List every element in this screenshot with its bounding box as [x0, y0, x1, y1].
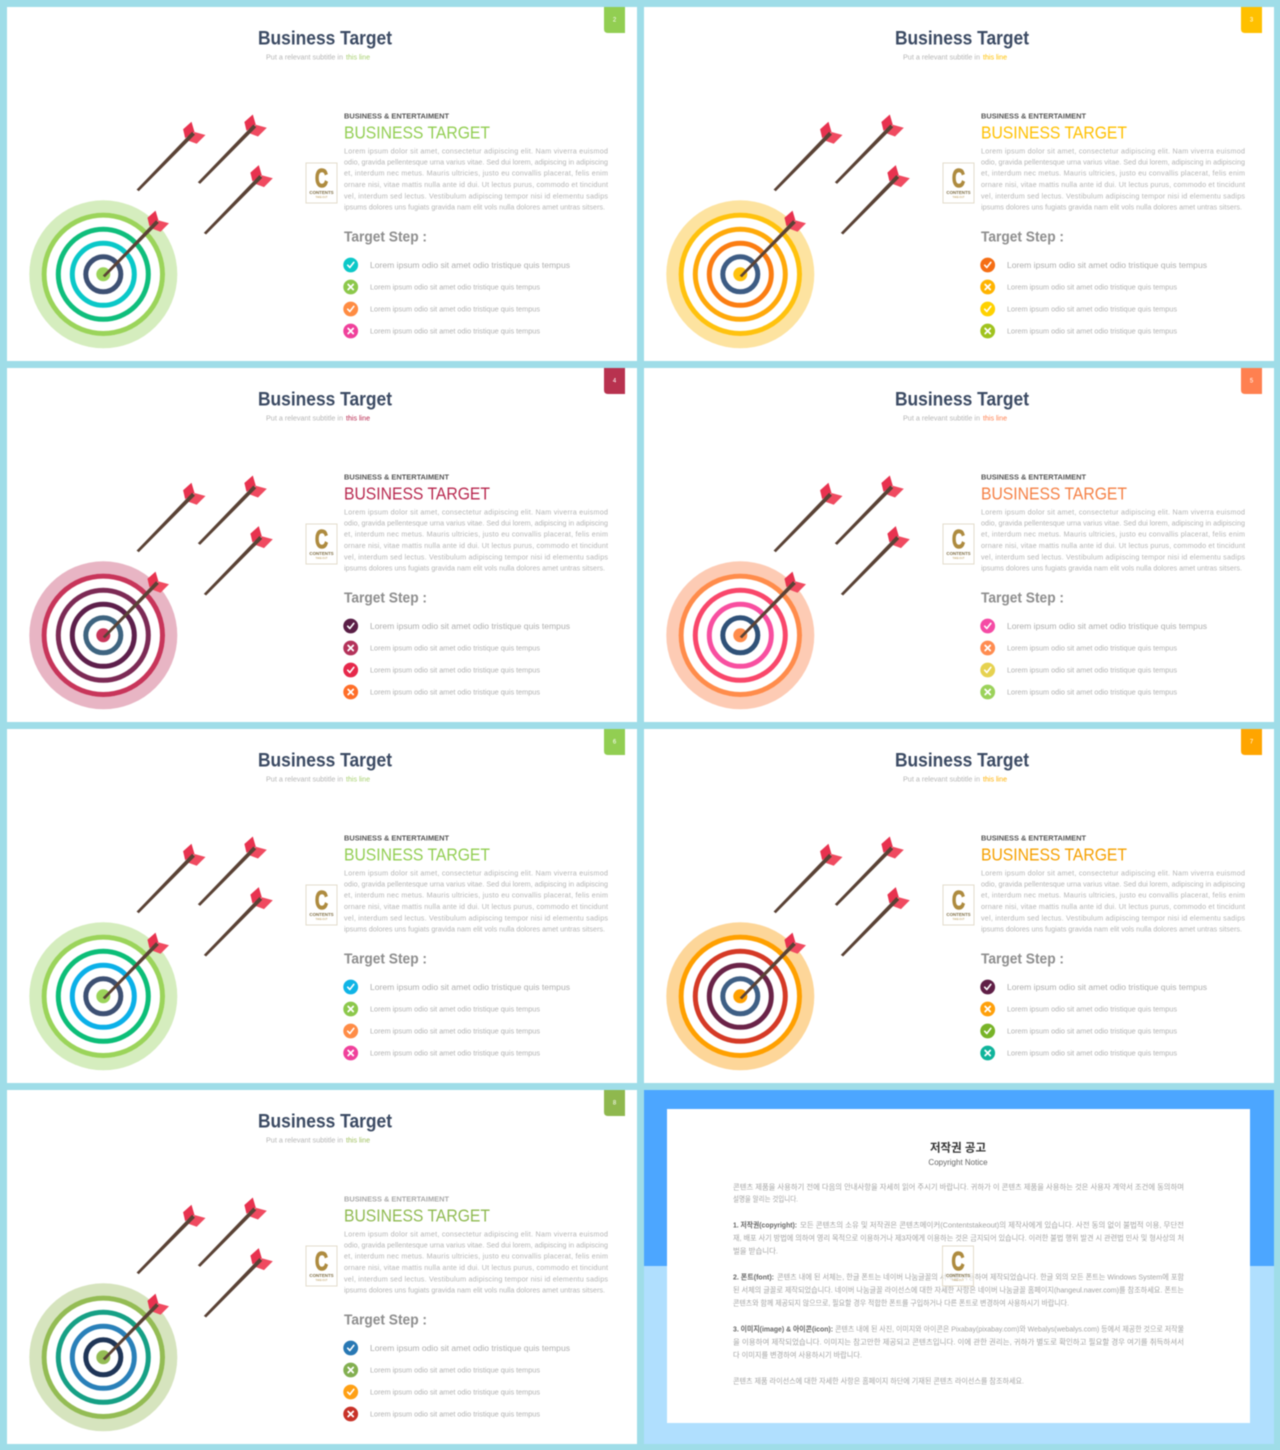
flying arrows: [137, 476, 273, 595]
panel: slide 4: [7, 368, 637, 722]
step heading: Target Step :: [344, 229, 427, 246]
logo: CONTENTS: [946, 190, 971, 195]
eyebrow: BUSINESS & ENTERTAIMENT: [344, 472, 449, 482]
paragraph: odio, gravida pellentesque urna varius vitae. Sed dui lorem, adipiscing in adipiscing: [981, 880, 1245, 889]
panel: slide 2: [7, 7, 637, 361]
title: Business Target: [258, 1110, 392, 1132]
step list: Lorem ipsum odio sit amet odio tristique quis tempus: [370, 982, 570, 992]
step list: Lorem ipsum odio sit amet odio tristique quis tempus: [370, 1412, 541, 1418]
subtitle: this line: [346, 416, 370, 422]
section 1: copyright: 벌을 받습니다.: [733, 1246, 778, 1256]
logo: C: [315, 163, 328, 193]
step list: Lorem ipsum odio sit amet odio tristique quis tempus: [370, 1050, 541, 1058]
step list: Lorem ipsum odio sit amet odio tristique quis tempus: [370, 1343, 570, 1353]
target with arrow: [666, 922, 814, 1070]
logo: [306, 163, 337, 203]
step list: Lorem ipsum odio sit amet odio tristique quis tempus: [370, 690, 541, 696]
paragraph: ipsums dolores uns fugiats gravida nam elit vols nulla dolores amet untras sitsers.: [981, 202, 1242, 211]
logo overlay: TAKE-OUT: [952, 1279, 964, 1282]
step heading: Target Step :: [344, 951, 427, 968]
section 1: copyright: 모든 콘텐츠의 소유 및 저작권은 콘텐츠메이커(Contentstakeout)의 제작사에게 있습니다. 사전 동의 없이 불법적 이용, 무단전: [800, 1220, 1184, 1230]
panel: copyright notice: [644, 1090, 1274, 1444]
heading: BUSINESS TARGET: [344, 845, 490, 865]
logo: C: [952, 163, 965, 193]
subtitle: Put a relevant subtitle in: [903, 776, 980, 784]
paragraph: Lorem ipsum dolor sit amet, consectetur adipiscing elit. Nam viverra euismod: [344, 146, 608, 155]
eyebrow: BUSINESS & ENTERTAIMENT: [981, 472, 1086, 482]
heading: BUSINESS TARGET: [981, 484, 1127, 504]
page tag 4: 4: [613, 378, 617, 384]
step list: Lorem ipsum odio sit amet odio tristique quis tempus: [370, 621, 570, 631]
step heading: Target Step :: [981, 951, 1064, 968]
paragraph: Lorem ipsum dolor sit amet, consectetur adipiscing elit. Nam viverra euismod: [981, 146, 1245, 155]
paragraph: [344, 507, 608, 572]
logo: CONTENTS: [946, 551, 971, 556]
target with arrow: [29, 561, 177, 709]
logo overlay: [942, 1246, 974, 1286]
step list: [980, 619, 1207, 699]
paragraph: vel, interdum sed lectus. Vestibulum adipiscing tempor nisi id elementu sadips: [981, 552, 1245, 561]
section 2: font: 콘텐츠 내에 된 서체는, 한글 폰트는 네이버 나눔글꼴의 서체를 사용하여 제작되었습니다. 한글 외의 모든 폰트는 Windows System에 포함: [777, 1272, 1184, 1282]
step list: Lorem ipsum odio sit amet odio tristique quis tempus: [1007, 1006, 1178, 1014]
section 3: image and icon: 콘텐츠 내에 된 사진, 이미지와 아이콘은 Pixabay(pixabay.com)와 Webalys(webalys.com) 등에서 제공한 것으로 저작물: [835, 1324, 1184, 1334]
step heading: Target Step :: [344, 1312, 427, 1329]
step heading: Target Step :: [981, 590, 1064, 607]
paragraph: odio, gravida pellentesque urna varius vitae. Sed dui lorem, adipiscing in adipiscing: [344, 158, 608, 167]
paragraph: vel, interdum sed lectus. Vestibulum adipiscing tempor nisi id elementu sadips: [344, 913, 608, 922]
paragraph: [981, 507, 1245, 572]
step list: Lorem ipsum odio sit amet odio tristique quis tempus: [1007, 306, 1178, 314]
section 3: image and icon: 을 이용하여 제작되었습니다. 이미지는 참고만한 제공되고 콘텐츠입니다. 이에 관한 권리는, 귀하가 별도로 확인하고 필요할 경우 여기를 취득하셔서: [733, 1336, 1184, 1346]
logo: C: [952, 885, 965, 915]
paragraph: odio, gravida pellentesque urna varius vitae. Sed dui lorem, adipiscing in adipiscing: [981, 519, 1245, 528]
page tag 6: 6: [613, 740, 617, 746]
section 2: font: 콘텐츠와 함께 제공되지 않으므로, 필요할 경우 적합한 폰트를 구입하거나 다른 폰트로 변경하여 사용하시기 바랍니다.: [733, 1298, 1069, 1308]
flying arrows: [774, 476, 910, 595]
flying arrows: [137, 1198, 273, 1317]
step list: Lorem ipsum odio sit amet odio tristique quis tempus: [370, 284, 541, 292]
step list: Lorem ipsum odio sit amet odio tristique quis tempus: [1007, 1050, 1178, 1058]
step list: Lorem ipsum odio sit amet odio tristique quis tempus: [370, 1390, 541, 1396]
paragraph: odio, gravida pellentesque urna varius vitae. Sed dui lorem, adipiscing in adipiscing: [981, 158, 1245, 167]
paragraph: ornare nisi, vitae mattis nulla ante id dui. Ut lectus purus, commodo et tincidunt: [981, 902, 1245, 911]
panel: slide 6: [7, 729, 637, 1083]
heading: BUSINESS TARGET: [981, 123, 1127, 143]
logo overlay: CONTENTS: [946, 1273, 970, 1278]
step list: [343, 1341, 570, 1421]
logo: [943, 524, 974, 564]
target with arrow: [29, 922, 177, 1070]
page tag 3: 3: [1250, 18, 1254, 24]
intro text: 설명을 알리는 것입니다.: [733, 1194, 798, 1204]
subtitle: this line: [983, 416, 1007, 422]
logo: [306, 524, 337, 564]
logo: CONTENTS: [309, 1273, 334, 1278]
page tag 8: [604, 1090, 625, 1116]
step list: Lorem ipsum odio sit amet odio tristique quis tempus: [1007, 284, 1178, 292]
step list: [343, 980, 570, 1060]
paragraph: et, interdum nec metus. Mauris ultricies, justo eu convallis placerat, felis enim: [981, 530, 1245, 539]
subtitle: Put a relevant subtitle in: [903, 54, 980, 62]
paragraph: vel, interdum sed lectus. Vestibulum adipiscing tempor nisi id elementu sadips: [344, 191, 608, 200]
subtitle: this line: [346, 1138, 370, 1144]
subtitle: this line: [346, 776, 370, 784]
section 2: font: 된 서체의 글꼴로 제작되었습니다. 네이버 나눔글꼴 라이선스에 대한 자세한 사항은 네이버 나눔글꼴 홈페이지(hangeul.naver.com)를 참조하세요. 폰트는: [733, 1284, 1184, 1294]
page tag 8: 8: [613, 1100, 617, 1106]
paragraph: ornare nisi, vitae mattis nulla ante id dui. Ut lectus purus, commodo et tincidunt: [344, 180, 608, 189]
logo overlay: C: [952, 1246, 965, 1276]
intro text: 콘텐츠 제품을 사용하기 전에 다음의 안내사항을 자세히 읽어 주시기 바랍니다. 귀하가 이 콘텐츠 제품을 사용하는 것은 사용자 계약서 조건에 동의하며: [733, 1182, 1184, 1192]
eyebrow: BUSINESS & ENTERTAIMENT: [344, 834, 449, 842]
step list: Lorem ipsum odio sit amet odio tristique quis tempus: [1007, 328, 1178, 336]
paragraph: ipsums dolores uns fugiats gravida nam elit vols nulla dolores amet untras sitsers.: [344, 563, 605, 572]
title: Business Target: [258, 749, 392, 771]
flying arrows: [774, 114, 910, 234]
heading: BUSINESS TARGET: [981, 845, 1127, 865]
logo: TAKE-OUT: [316, 918, 328, 921]
title: Business Target: [258, 388, 392, 410]
page tag 4: [604, 368, 625, 394]
logo: C: [315, 524, 328, 554]
paragraph: vel, interdum sed lectus. Vestibulum adipiscing tempor nisi id elementu sadips: [981, 191, 1245, 200]
subtitle: Put a relevant subtitle in: [266, 416, 343, 422]
heading: BUSINESS TARGET: [344, 1206, 490, 1226]
step heading: Target Step :: [981, 229, 1064, 246]
step list: [980, 980, 1207, 1060]
step list: Lorem ipsum odio sit amet odio tristique quis tempus: [370, 260, 570, 270]
title: Business Target: [895, 388, 1029, 410]
paragraph: Lorem ipsum dolor sit amet, consectetur adipiscing elit. Nam viverra euismod: [344, 507, 608, 516]
subtitle: this line: [346, 54, 370, 62]
copyright subtitle: Copyright Notice: [928, 1158, 988, 1167]
title: Business Target: [895, 27, 1029, 49]
step list: Lorem ipsum odio sit amet odio tristique quis tempus: [370, 1368, 541, 1374]
paragraph: [344, 868, 608, 933]
section 1: copyright: 재, 배포 사기 방법에 의하여 영리 목적으로 이용하거나 제3자에게 이용하는 것은 금지되어 있습니다. 이러한 불법 행위 발견 시 관련법 민사 및 형사상의 처: [733, 1232, 1184, 1242]
paragraph: ipsums dolores uns fugiats gravida nam elit vols nulla dolores amet untras sitsers.: [981, 924, 1242, 933]
paragraph: et, interdum nec metus. Mauris ultricies, justo eu convallis placerat, felis enim: [344, 891, 608, 900]
step list: [343, 619, 570, 699]
logo: C: [315, 1246, 328, 1276]
step list: Lorem ipsum odio sit amet odio tristique quis tempus: [1007, 1028, 1178, 1036]
logo: TAKE-OUT: [316, 196, 328, 199]
logo: TAKE-OUT: [953, 918, 965, 921]
step list: Lorem ipsum odio sit amet odio tristique quis tempus: [370, 306, 541, 314]
page tag 2: 2: [613, 18, 617, 24]
paragraph: et, interdum nec metus. Mauris ultricies, justo eu convallis placerat, felis enim: [981, 891, 1245, 900]
step list: Lorem ipsum odio sit amet odio tristique quis tempus: [1007, 646, 1178, 652]
eyebrow: BUSINESS & ENTERTAIMENT: [344, 112, 449, 120]
heading: BUSINESS TARGET: [344, 484, 490, 504]
paragraph: ornare nisi, vitae mattis nulla ante id dui. Ut lectus purus, commodo et tincidunt: [981, 180, 1245, 189]
paragraph: [344, 146, 608, 211]
subtitle: Put a relevant subtitle in: [903, 416, 980, 422]
logo: CONTENTS: [309, 190, 334, 195]
section 2: font: [733, 1272, 1184, 1308]
logo: [306, 885, 337, 925]
paragraph: odio, gravida pellentesque urna varius vitae. Sed dui lorem, adipiscing in adipiscing: [344, 880, 608, 889]
page tag 6: [604, 729, 625, 755]
logo: TAKE-OUT: [953, 557, 965, 560]
eyebrow: BUSINESS & ENTERTAIMENT: [344, 1194, 449, 1204]
step list: Lorem ipsum odio sit amet odio tristique quis tempus: [1007, 982, 1207, 992]
paragraph: Lorem ipsum dolor sit amet, consectetur adipiscing elit. Nam viverra euismod: [344, 1229, 608, 1238]
paragraph: Lorem ipsum dolor sit amet, consectetur adipiscing elit. Nam viverra euismod: [344, 868, 608, 877]
step list: [980, 258, 1207, 338]
eyebrow: BUSINESS & ENTERTAIMENT: [981, 112, 1086, 120]
step list: Lorem ipsum odio sit amet odio tristique quis tempus: [370, 646, 541, 652]
step list: Lorem ipsum odio sit amet odio tristique quis tempus: [1007, 668, 1178, 674]
page tag 3: [1241, 7, 1262, 33]
target with arrow: [666, 561, 814, 709]
target with arrow: [29, 1283, 177, 1431]
subtitle: Put a relevant subtitle in: [266, 776, 343, 784]
subtitle: this line: [983, 776, 1007, 784]
paragraph: ornare nisi, vitae mattis nulla ante id dui. Ut lectus purus, commodo et tincidunt: [344, 541, 608, 550]
panel: slide 3: [644, 7, 1274, 361]
subtitle: Put a relevant subtitle in: [266, 54, 343, 62]
target with arrow: [29, 200, 177, 348]
target with arrow: [666, 200, 814, 348]
logo: CONTENTS: [309, 912, 334, 917]
flying arrows: [137, 836, 273, 956]
paragraph: Lorem ipsum dolor sit amet, consectetur adipiscing elit. Nam viverra euismod: [981, 507, 1245, 516]
logo: TAKE-OUT: [953, 196, 965, 199]
paragraph: et, interdum nec metus. Mauris ultricies, justo eu convallis placerat, felis enim: [344, 1252, 608, 1261]
step list: Lorem ipsum odio sit amet odio tristique quis tempus: [1007, 621, 1207, 631]
paragraph: vel, interdum sed lectus. Vestibulum adipiscing tempor nisi id elementu sadips: [344, 1274, 608, 1283]
paragraph: ipsums dolores uns fugiats gravida nam elit vols nulla dolores amet untras sitsers.: [981, 563, 1242, 572]
logo: TAKE-OUT: [316, 1279, 328, 1282]
page tag 5: 5: [1250, 378, 1254, 384]
flying arrows: [774, 836, 910, 956]
paragraph: odio, gravida pellentesque urna varius vitae. Sed dui lorem, adipiscing in adipiscing: [344, 1241, 608, 1250]
panel: slide 8: [7, 1090, 637, 1444]
step list: Lorem ipsum odio sit amet odio tristique quis tempus: [370, 668, 541, 674]
step list: Lorem ipsum odio sit amet odio tristique quis tempus: [1007, 260, 1207, 270]
section 1: copyright: [733, 1220, 1184, 1256]
step list: Lorem ipsum odio sit amet odio tristique quis tempus: [370, 1006, 541, 1014]
section 2: font: 2. 폰트(font):: [733, 1272, 774, 1282]
section 3: image and icon: [733, 1324, 1184, 1360]
step list: [343, 258, 570, 338]
page tag 5: [1241, 368, 1262, 394]
license note: 콘텐츠 제품 라이선스에 대한 자세한 사항은 홈페이지 하단에 기재된 콘텐츠 라이선스를 참조하세요.: [733, 1376, 1024, 1386]
page tag 2: [604, 7, 625, 33]
paragraph: ipsums dolores uns fugiats gravida nam elit vols nulla dolores amet untras sitsers.: [344, 202, 605, 211]
paragraph: [981, 146, 1245, 211]
title: Business Target: [258, 27, 392, 49]
logo: C: [315, 885, 328, 915]
logo: [306, 1246, 337, 1286]
section 3: image and icon: 3. 이미지(image) & 아이콘(icon):: [733, 1324, 833, 1334]
paragraph: ornare nisi, vitae mattis nulla ante id dui. Ut lectus purus, commodo et tincidunt: [981, 541, 1245, 550]
logo: TAKE-OUT: [316, 557, 328, 560]
copyright title: 저작권 공고: [930, 1140, 986, 1154]
logo: C: [952, 524, 965, 554]
paragraph: vel, interdum sed lectus. Vestibulum adipiscing tempor nisi id elementu sadips: [981, 913, 1245, 922]
section 3: image and icon: 다 이미지를 변경하여 사용하시기 바랍니다.: [733, 1350, 862, 1360]
paragraph: et, interdum nec metus. Mauris ultricies, justo eu convallis placerat, felis enim: [344, 169, 608, 178]
title: Business Target: [895, 749, 1029, 771]
intro text: [733, 1182, 1184, 1204]
paragraph: et, interdum nec metus. Mauris ultricies, justo eu convallis placerat, felis enim: [981, 169, 1245, 178]
logo: CONTENTS: [946, 912, 971, 917]
step list: Lorem ipsum odio sit amet odio tristique quis tempus: [1007, 690, 1178, 696]
panel: slide 7: [644, 729, 1274, 1083]
step list: Lorem ipsum odio sit amet odio tristique quis tempus: [370, 1028, 541, 1036]
panel: slide 5: [644, 368, 1274, 722]
paragraph: odio, gravida pellentesque urna varius vitae. Sed dui lorem, adipiscing in adipiscing: [344, 519, 608, 528]
step heading: Target Step :: [344, 590, 427, 607]
logo: [943, 885, 974, 925]
subtitle: this line: [983, 54, 1007, 62]
paragraph: et, interdum nec metus. Mauris ultricies, justo eu convallis placerat, felis enim: [344, 530, 608, 539]
eyebrow: BUSINESS & ENTERTAIMENT: [981, 834, 1086, 842]
paragraph: [344, 1229, 608, 1294]
paragraph: ornare nisi, vitae mattis nulla ante id dui. Ut lectus purus, commodo et tincidunt: [344, 902, 608, 911]
page tag 7: 7: [1250, 740, 1254, 746]
page tag 7: [1241, 729, 1262, 755]
paragraph: ornare nisi, vitae mattis nulla ante id dui. Ut lectus purus, commodo et tincidunt: [344, 1263, 608, 1272]
subtitle: Put a relevant subtitle in: [266, 1138, 343, 1144]
section 1: copyright: 1. 저작권(copyright):: [733, 1220, 797, 1230]
paragraph: vel, interdum sed lectus. Vestibulum adipiscing tempor nisi id elementu sadips: [344, 552, 608, 561]
step list: Lorem ipsum odio sit amet odio tristique quis tempus: [370, 328, 541, 336]
paragraph: ipsums dolores uns fugiats gravida nam elit vols nulla dolores amet untras sitsers.: [344, 924, 605, 933]
paragraph: ipsums dolores uns fugiats gravida nam elit vols nulla dolores amet untras sitsers.: [344, 1285, 605, 1294]
heading: BUSINESS TARGET: [344, 123, 490, 143]
paragraph: Lorem ipsum dolor sit amet, consectetur adipiscing elit. Nam viverra euismod: [981, 868, 1245, 877]
logo: [943, 163, 974, 203]
paragraph: [981, 868, 1245, 933]
flying arrows: [137, 114, 273, 234]
logo: CONTENTS: [309, 551, 334, 556]
